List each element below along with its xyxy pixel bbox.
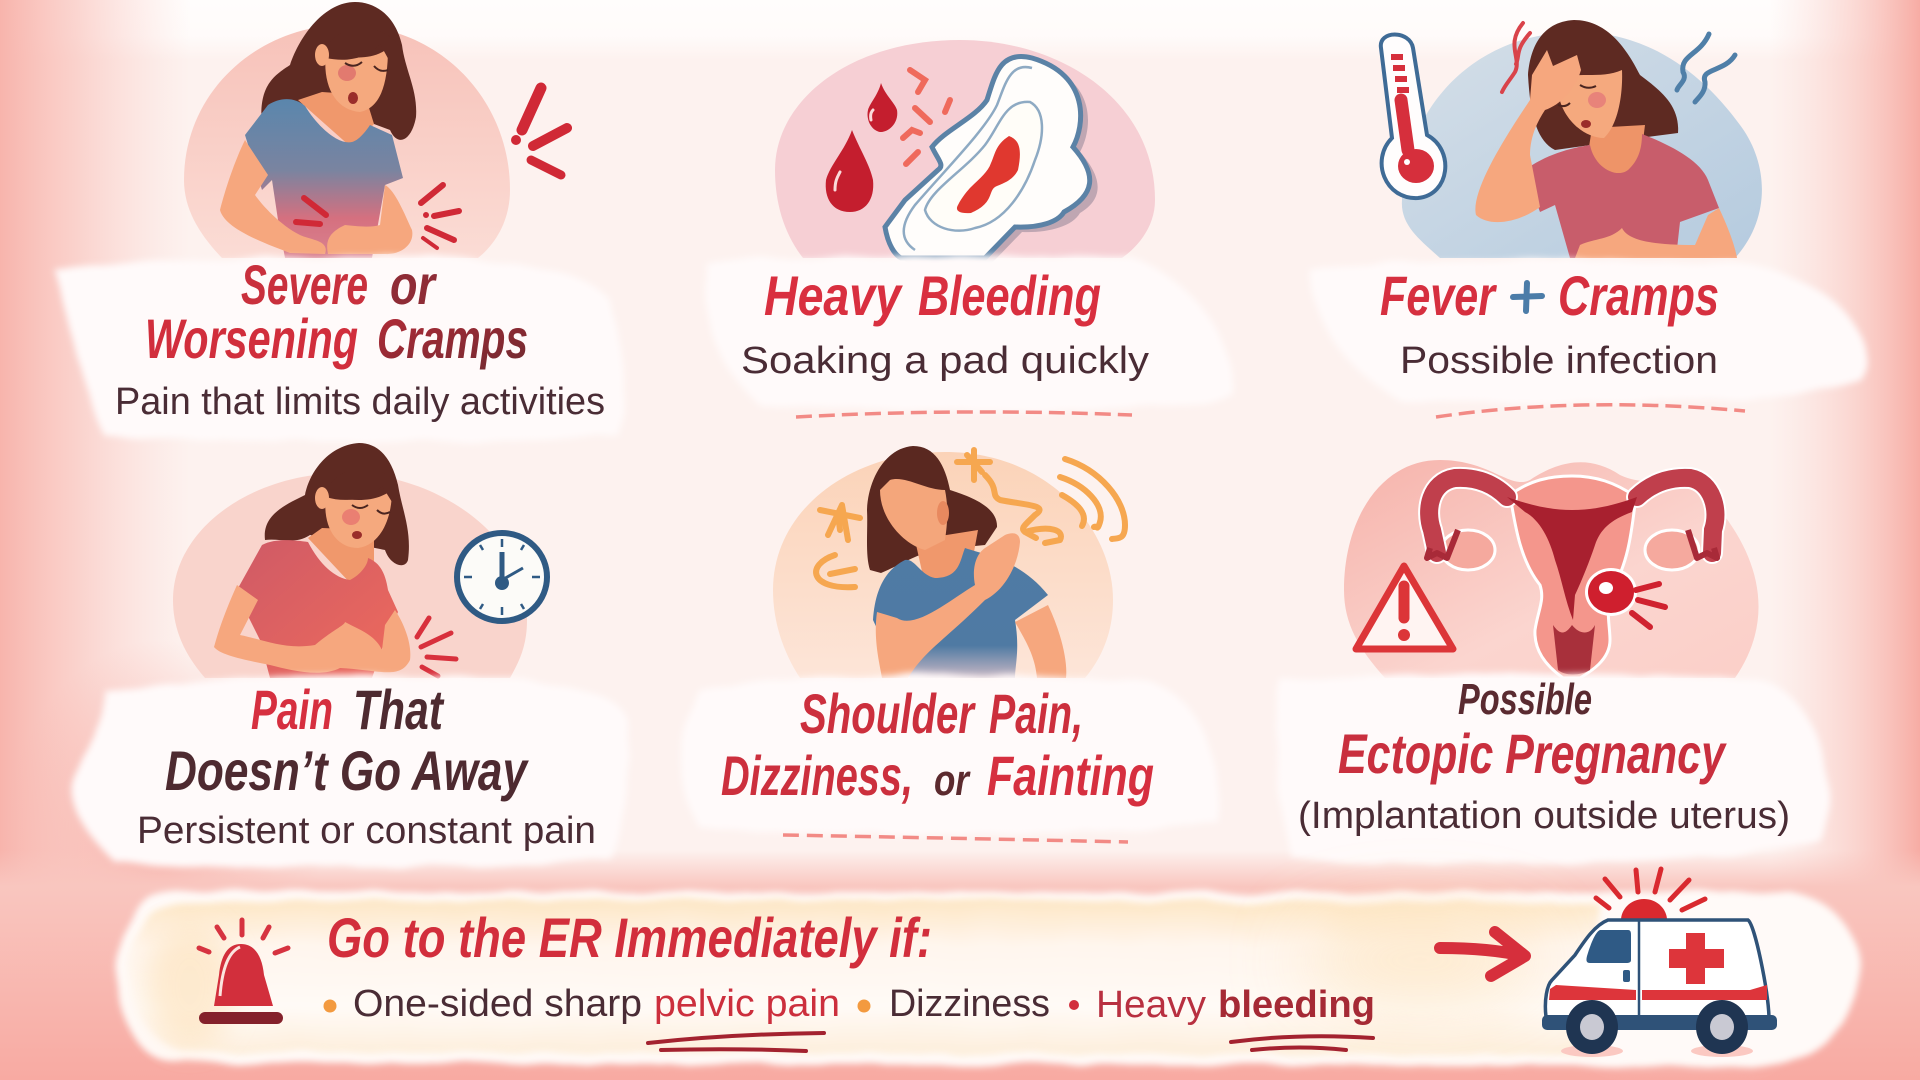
text plate	[55, 256, 625, 442]
underline: bleeding	[1231, 1036, 1373, 1050]
underline: pelvic pain	[648, 1033, 824, 1051]
icon: thermometer	[1381, 34, 1445, 198]
symptom list: pelvic pain	[654, 983, 840, 1025]
illustration: woman holding abdomen	[184, 2, 510, 258]
card: fever plus cramps	[1310, 20, 1865, 417]
heading: shoulder pain dizziness or fainting	[721, 682, 1154, 807]
symptom list: Dizziness	[889, 983, 1050, 1025]
banner: go to the er immediately	[117, 869, 1859, 1066]
subtext: Soaking a pad quickly	[741, 340, 1149, 382]
heading: shoulder pain dizziness or fainting: Shoulder	[800, 682, 976, 745]
heading: heavy bleeding	[764, 264, 1101, 327]
heading: pain that doesn't go away	[165, 678, 529, 802]
card: severe or worsening cramps	[55, 2, 625, 442]
text plate	[1276, 674, 1828, 865]
heading: fever plus cramps: Cramps	[1558, 264, 1719, 327]
icon: ectopic site	[1585, 568, 1665, 627]
dashed divider	[796, 412, 1132, 417]
symptom list: One-sided sharp	[353, 983, 642, 1025]
symptom list	[324, 983, 1375, 1026]
illustration: pad and blood drops	[775, 40, 1155, 263]
arrow	[1440, 932, 1525, 976]
illustration: woman with persistent pain	[173, 443, 527, 678]
icon: warning triangle	[1356, 566, 1453, 649]
subtext: Pain that limits daily activities	[115, 381, 605, 423]
icon: clock	[457, 533, 547, 621]
dashed divider	[783, 835, 1128, 842]
heading: heavy bleeding: Heavy	[764, 264, 903, 327]
card: shoulder pain dizziness fainting	[681, 446, 1219, 842]
heading: possible ectopic pregnancy: Possible	[1458, 675, 1592, 724]
heading: shoulder pain dizziness or fainting: Fainting	[987, 744, 1154, 807]
icon: alarm siren	[199, 920, 288, 1024]
illustration: woman with fever and thermometer	[1402, 20, 1762, 258]
text plate	[72, 675, 628, 868]
heading: severe or worsening cramps: Worsening	[145, 307, 358, 370]
illustration: uterus diagram	[1344, 460, 1759, 678]
illustration: woman holding shoulder	[773, 446, 1113, 678]
symptom list: Heavy	[1096, 984, 1206, 1026]
heading: possible ectopic pregnancy: Ectopic Pregnancy	[1338, 722, 1727, 785]
heading: pain that doesn't go away: Pain	[251, 678, 333, 741]
heading: go to the er immediately if: Go to the ER Immediately if:	[327, 906, 932, 969]
heading: severe or worsening cramps: Cramps	[377, 307, 528, 370]
icon: dizziness squiggles	[816, 450, 1125, 587]
text plate	[704, 255, 1235, 412]
heading: possible ectopic pregnancy	[1338, 675, 1727, 785]
subtext: Possible infection	[1400, 340, 1718, 382]
heading: fever plus cramps	[1380, 264, 1719, 327]
heading: pain that doesn't go away: That	[353, 678, 445, 741]
card: pain that does not go away	[72, 443, 628, 868]
symptom list: bleeding	[1218, 984, 1375, 1026]
heading: severe or worsening cramps: or	[390, 253, 438, 316]
text plate	[681, 675, 1219, 835]
heading: shoulder pain dizziness or fainting: Pain,	[989, 682, 1083, 745]
icon: pain marks	[296, 88, 567, 248]
subtext: Persistent or constant pain	[137, 810, 596, 852]
heading: severe or worsening cramps	[145, 253, 528, 370]
dashed divider	[1436, 405, 1745, 417]
text plate	[1310, 260, 1865, 404]
heading: shoulder pain dizziness or fainting: Dizziness,	[721, 744, 913, 807]
card: heavy bleeding	[704, 40, 1235, 417]
heading: shoulder pain dizziness or fainting: or	[934, 756, 971, 805]
subtext: (Implantation outside uterus)	[1298, 795, 1790, 837]
heading: fever plus cramps: Fever	[1380, 264, 1497, 327]
heading: pain that doesn't go away: Doesn’t Go Away	[165, 739, 529, 802]
heading: heavy bleeding: Bleeding	[918, 264, 1101, 327]
icon: ambulance	[1542, 869, 1777, 1057]
banner background	[117, 890, 1859, 1066]
icon: pain rays	[417, 618, 456, 676]
heading: severe or worsening cramps: Severe	[241, 253, 368, 316]
card: possible ectopic pregnancy	[1276, 460, 1828, 865]
